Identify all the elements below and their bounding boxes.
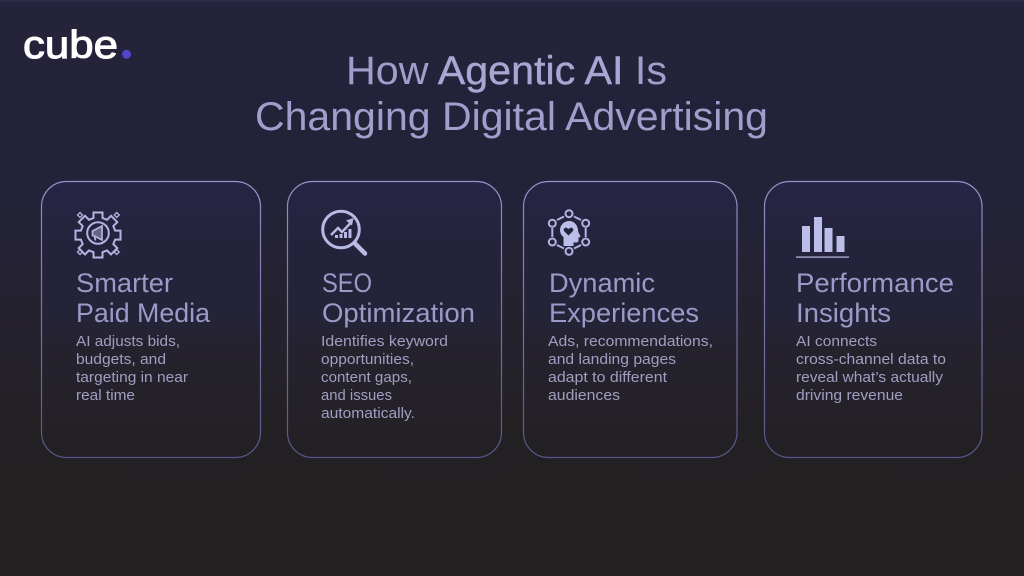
body text: targeting in near bbox=[76, 370, 188, 386]
icon: gear with megaphone bbox=[75, 212, 121, 258]
heading bbox=[76, 268, 211, 328]
heading bbox=[549, 268, 699, 328]
body text: adapt to different bbox=[548, 370, 667, 386]
heading: Performance bbox=[796, 268, 954, 298]
body text bbox=[76, 334, 188, 404]
body text: and issues bbox=[321, 388, 392, 404]
panel: SEO Optimization bbox=[288, 182, 502, 458]
panel: Performance Insights bbox=[764, 182, 982, 458]
body text bbox=[548, 334, 713, 404]
logo: cube: cube bbox=[23, 24, 118, 67]
body text: AI connects bbox=[796, 334, 877, 350]
body text: automatically. bbox=[321, 406, 415, 422]
heading bbox=[796, 268, 954, 328]
body text: audiences bbox=[548, 388, 620, 404]
heading: Optimization bbox=[322, 298, 475, 328]
panel: Smarter Paid Media bbox=[42, 182, 260, 458]
body text bbox=[796, 334, 946, 404]
body text: content gaps, bbox=[321, 370, 412, 386]
body text: Identifies keyword bbox=[321, 334, 448, 350]
heading: Paid Media bbox=[76, 298, 211, 328]
body text: budgets, and bbox=[76, 352, 166, 368]
icon: bar chart bbox=[796, 217, 849, 258]
body text: Ads, recommendations, bbox=[548, 334, 713, 350]
body text: reveal what’s actually bbox=[796, 370, 944, 386]
title: How Agentic AI Is bbox=[346, 49, 667, 93]
title: Changing Digital Advertising bbox=[255, 95, 768, 139]
body text: AI adjusts bids, bbox=[76, 334, 180, 350]
body text: and landing pages bbox=[548, 352, 676, 368]
heading: SEO bbox=[322, 268, 372, 298]
body text: real time bbox=[76, 388, 135, 404]
body text: opportunities, bbox=[321, 352, 414, 368]
heading bbox=[322, 268, 475, 328]
heading: Experiences bbox=[549, 298, 699, 328]
icon: head with heart in network bbox=[549, 210, 589, 255]
title bbox=[255, 49, 768, 139]
heading: Dynamic bbox=[549, 268, 655, 298]
icon: magnifier with chart bbox=[323, 211, 365, 254]
body text bbox=[321, 334, 448, 422]
heading: Smarter bbox=[76, 268, 173, 298]
heading: Insights bbox=[796, 298, 891, 328]
panel: Dynamic Experiences bbox=[524, 182, 737, 458]
body text: cross-channel data to bbox=[796, 352, 946, 368]
body text: driving revenue bbox=[796, 388, 903, 404]
